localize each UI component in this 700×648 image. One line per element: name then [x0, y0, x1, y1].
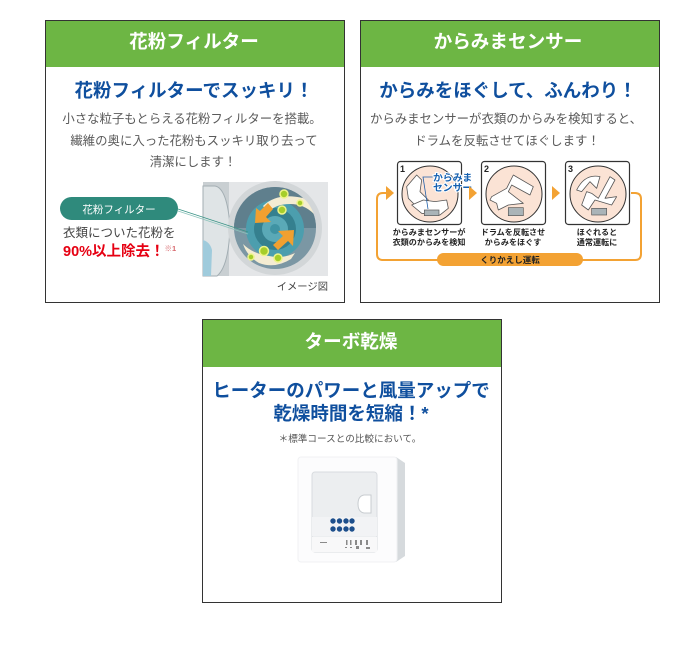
repeat pill: [437, 253, 583, 266]
photo: drum with filter: [203, 181, 328, 276]
header: turbo drying: ターボ乾燥: [305, 331, 398, 352]
text block: tangle sensor description: からみまセンサーが衣類のからみを検知すると、: [370, 111, 642, 126]
step captions: ほぐれると: [577, 228, 617, 237]
panel: turbo drying: [202, 320, 502, 602]
label pill: filter: [60, 197, 178, 220]
step 2: [482, 162, 546, 224]
callout: 90 percent removal: [63, 225, 176, 260]
callout: 90 percent removal: 90%以上除去！: [63, 244, 165, 260]
heading: turbo drying: 乾燥時間を短縮！*: [273, 403, 429, 424]
repeat pill: くりかえし運転: [480, 255, 540, 265]
step 2: 2: [484, 164, 489, 174]
heading: pollen filter: 花粉フィルターでスッキリ！: [74, 80, 314, 101]
sensor label: [433, 172, 472, 194]
step captions: からみをほぐす: [485, 238, 541, 247]
text block: pollen filter description: 繊維の奥に入った花粉もスッキリ取り去って: [70, 133, 318, 148]
step captions: ドラムを反転させ: [481, 227, 545, 237]
step captions: からみまセンサーが: [393, 227, 465, 237]
panel: pollen filter: [46, 20, 344, 302]
heading: tangle sensor: からみをほぐして、ふんわり！: [379, 80, 637, 101]
leader line: [178, 209, 248, 234]
header: tangle sensor: からみまセンサー: [434, 31, 582, 52]
text block: pollen filter description: [62, 111, 322, 169]
step 3: 3: [568, 164, 573, 174]
text block: tangle sensor description: ドラムを反転させてほぐします！: [414, 134, 600, 148]
step 1: 1: [400, 164, 405, 174]
sensor label: センサー: [433, 182, 472, 194]
callout: 90 percent removal: 衣類についた花粉を: [63, 225, 176, 240]
header: turbo drying: [203, 320, 501, 367]
caption: image note: イメージ図: [277, 281, 328, 293]
header: pollen filter: 花粉フィルター: [129, 31, 259, 52]
text block: pollen filter description: 小さな粒子もとらえる花粉フィルターを搭載。: [62, 111, 322, 126]
loop arrow: [377, 186, 641, 260]
dryer illustration: [298, 457, 405, 562]
heading: turbo drying: [212, 380, 490, 424]
text block: pollen filter description: 清潔にします！: [150, 155, 236, 169]
step 3: [566, 162, 630, 224]
sensor label: からみま: [433, 172, 472, 184]
arrow: step 1 to 2: [469, 186, 477, 200]
step 1: [398, 162, 472, 224]
step captions: 通常運転に: [577, 237, 617, 247]
heading: turbo drying: ヒーターのパワーと風量アップで: [212, 380, 490, 401]
header: pollen filter: [46, 21, 344, 67]
text block: tangle sensor description: [370, 111, 642, 148]
footnote: ＊標準コースとの比較において。: [279, 433, 421, 445]
callout: 90 percent removal: ※1: [165, 244, 176, 253]
step captions: 衣類のからみを検知: [393, 237, 465, 247]
arrow: step 2 to 3: [552, 186, 560, 200]
label pill: filter: 花粉フィルター: [82, 203, 156, 216]
header: tangle sensor: [361, 21, 659, 67]
panel: tangle sensor: [360, 20, 660, 302]
step captions: [393, 227, 617, 247]
